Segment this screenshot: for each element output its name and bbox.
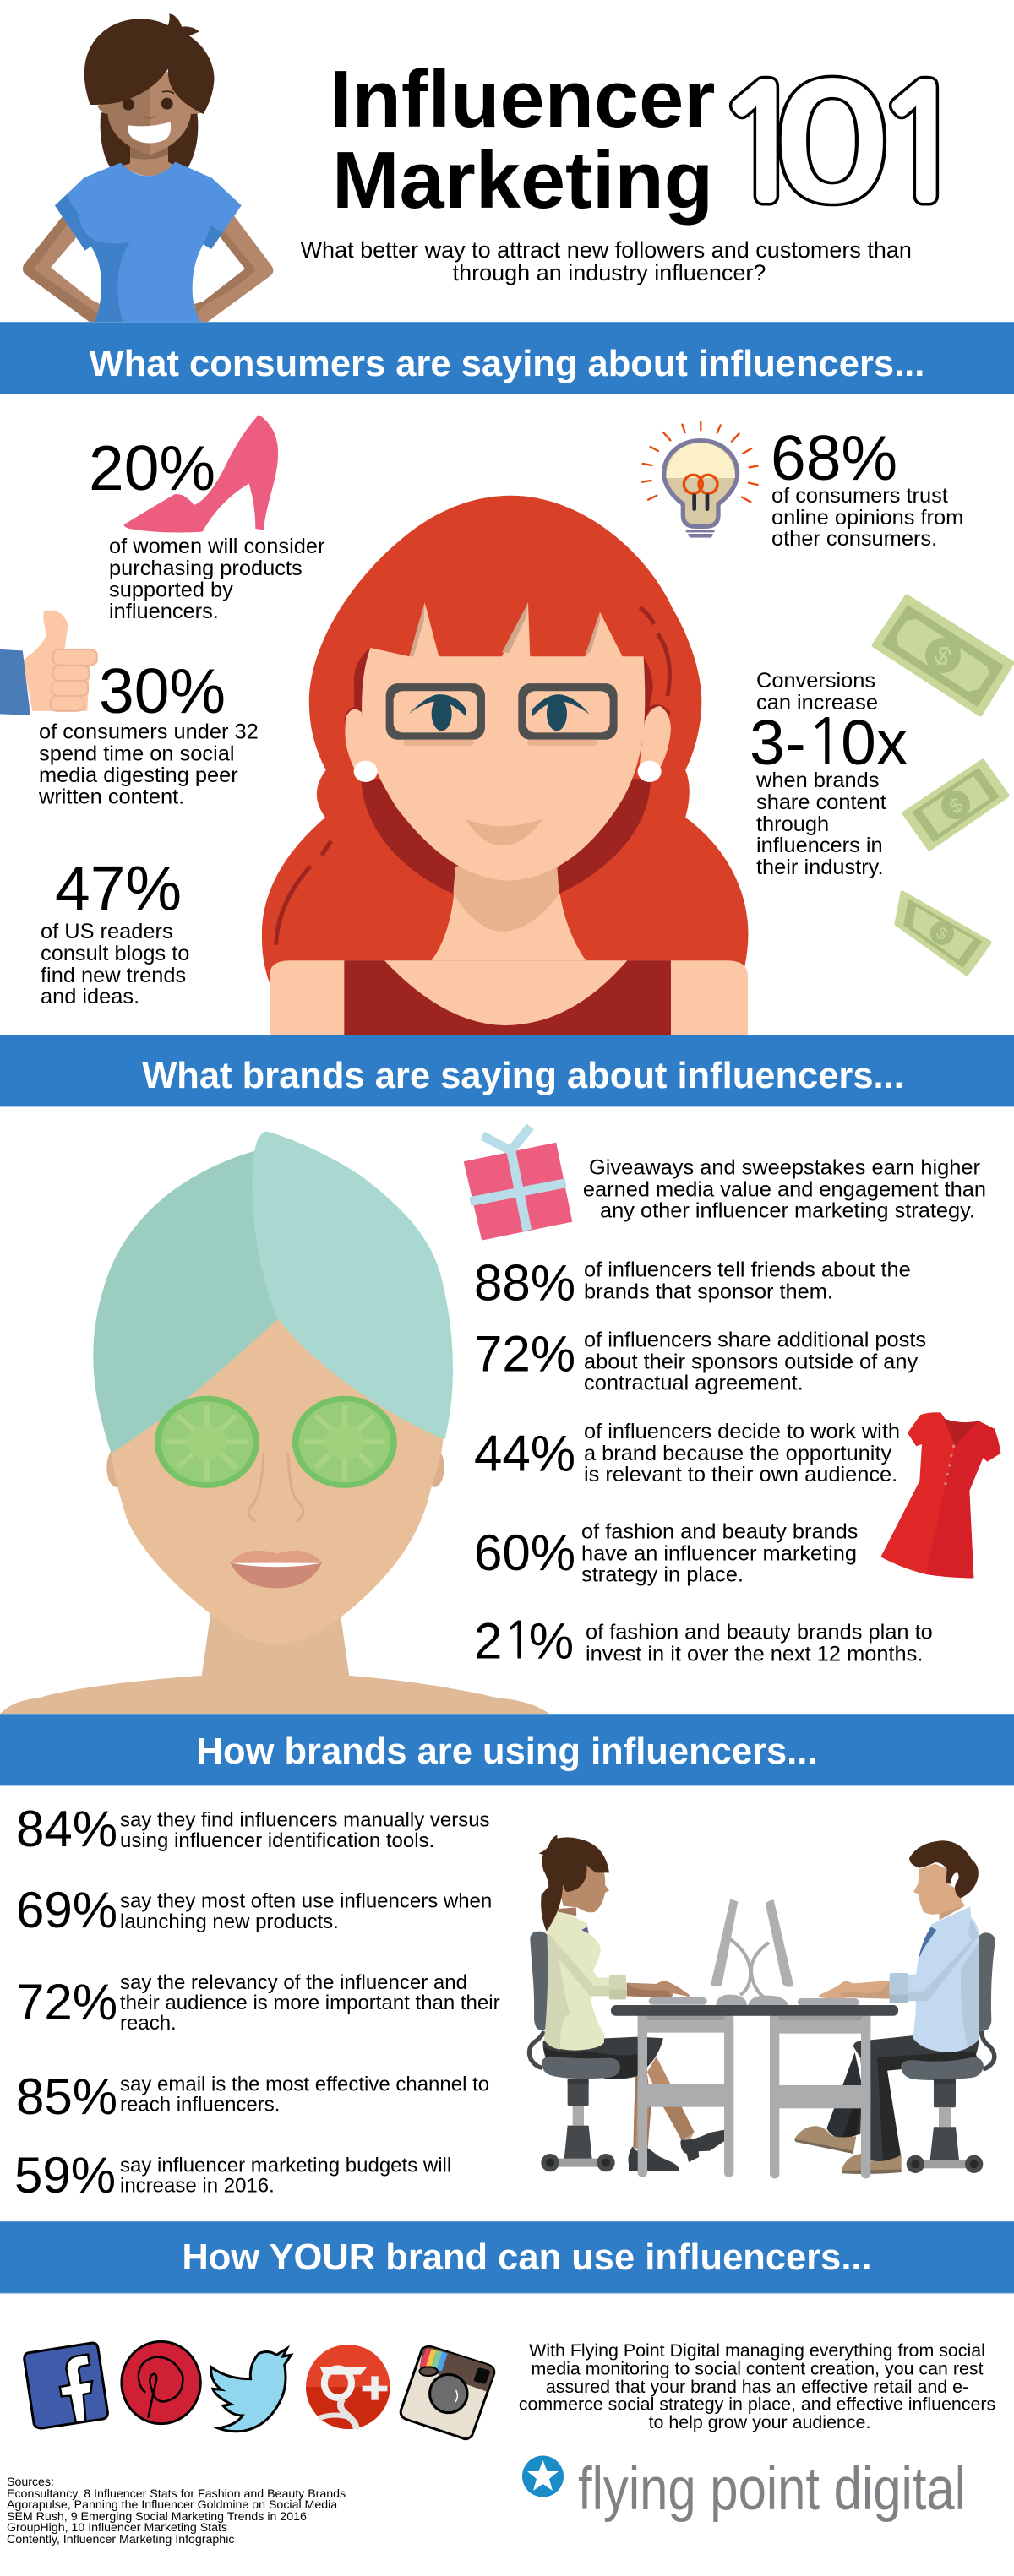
stat: 44%: 44% (474, 1426, 575, 1481)
banner: how your brand can use: How YOUR brand can use influencers... (182, 2237, 872, 2278)
stat: 59%: increase in 2016. (120, 2174, 275, 2198)
icon: dollar bill large: $ (930, 639, 957, 672)
stat: 72% relevancy: say the relevancy of the influencer and (120, 1971, 467, 1994)
title number: outlined 101: 1 (875, 67, 968, 220)
stat: 85%: 85% (16, 2068, 117, 2125)
stat: 84%: 84% (16, 1801, 117, 1857)
sources: SEM Rush, 9 Emerging Social Marketing Trends in 2016 (7, 2510, 307, 2524)
stat: 59% (14, 2147, 451, 2204)
stat: 72% share additional posts (474, 1326, 926, 1395)
stat: 69%: launching new products. (120, 1910, 339, 1933)
text: flying point digital pitch: With Flying Point Digital managing everything from social (529, 2340, 985, 2361)
stat: 60% (474, 1520, 859, 1586)
stat: 85% (16, 2068, 489, 2125)
title number: outlined 101: 0 (776, 66, 887, 220)
stat: 44%: a brand because the opportunity (584, 1442, 892, 1465)
banner: what consumers are saying: What consumers are saying about influencers... (90, 344, 924, 384)
sources: Agorapulse, Panning the Influencer Goldmine on Social Media (7, 2498, 337, 2512)
stat: 84%: say they find influencers manually versus (120, 1809, 490, 1831)
stat: 88%: 88% (474, 1255, 575, 1311)
subtitle: through an industry influencer? (453, 260, 766, 285)
illustration: red-haired woman with glasses (262, 496, 748, 1048)
stat: 72% share additional posts: about their sponsors outside of any (584, 1350, 919, 1373)
stat: conversions 3-10x: Conversions (756, 669, 875, 693)
icon: gift box (464, 1127, 572, 1241)
banner: what consumers are saying (0, 323, 1014, 394)
text: giveaways and sweepstakes: earned media value and engagement than (583, 1177, 986, 1201)
title number: outlined 101 (715, 66, 968, 220)
icon: pink high heel (124, 415, 278, 533)
stat: 20% of women: purchasing products (109, 557, 303, 580)
banner: what brands are saying (0, 1035, 1014, 1106)
icon: dollar bill small: $ (933, 924, 951, 944)
icon: pinterest (122, 2341, 200, 2424)
title number: outlined 101: 1 (715, 67, 808, 220)
stat: 21% (474, 1613, 933, 1669)
stat: conversions 3-10x: their industry. (756, 856, 884, 879)
icon: instagram camera (401, 2346, 494, 2439)
icon: thumbs up (0, 611, 97, 715)
stat: 44%: of influencers decide to work with (584, 1420, 900, 1443)
subtitle: What better way to attract new followers and customers than (301, 237, 912, 263)
sources: GroupHigh, 10 Influencer Marketing Stats (7, 2521, 227, 2535)
title number: outlined 101: 0 (776, 66, 887, 220)
stat: conversions 3-10x: influencers in (756, 834, 883, 857)
stat: 84% (16, 1801, 490, 1857)
stat: 72% share additional posts: 72% (474, 1326, 575, 1382)
stat: 68% trust online opinions: other consumers. (771, 527, 937, 551)
stat: 30% of consumers under 32: media digesting peer (39, 764, 238, 787)
stat: 88% (474, 1255, 911, 1311)
stat: 44%: is relevant to their own audience. (584, 1463, 897, 1486)
stat: 44% (474, 1420, 900, 1486)
stat: conversions 3-10x: when brands (755, 769, 879, 792)
stat: conversions 3-10x: through (756, 812, 829, 836)
icon: light bulb (642, 421, 758, 538)
banner: how your brand can use (0, 2221, 1014, 2293)
stat: 72% relevancy: their audience is more important than their (120, 1992, 500, 2014)
stat: 69% (16, 1882, 492, 1938)
stat: 47% of US readers (41, 853, 196, 1008)
stat: 60%: have an influencer marketing (581, 1542, 857, 1566)
stat: 59%: 59% (14, 2147, 116, 2204)
title (330, 55, 715, 226)
stat: 30% of consumers under 32: spend time on social (39, 742, 234, 765)
stat: 30% of consumers under 32: 30% (99, 655, 226, 726)
illustration: woman with towel and cucumber slices (0, 1131, 556, 1720)
text: giveaways and sweepstakes: Giveaways and sweepstakes earn higher (589, 1155, 980, 1179)
stat: 88%: of influencers tell friends about the (584, 1258, 911, 1282)
illustration: woman at desk (529, 1835, 769, 2177)
illustration: smiling woman in blue shirt (23, 13, 273, 323)
stat: 72% relevancy: reach. (120, 2012, 177, 2035)
stat: 69%: 69% (16, 1882, 117, 1938)
stat: conversions 3-10x: 3-10x (750, 707, 908, 778)
text: giveaways and sweepstakes: any other influencer marketing strategy. (600, 1199, 975, 1223)
banner: what brands are saying: What brands are saying about influencers... (142, 1056, 904, 1096)
stat: 68% trust online opinions: of consumers trust (771, 484, 948, 508)
stat: 60%: strategy in place. (581, 1562, 744, 1586)
stat: 20% of women: supported by (109, 578, 233, 601)
icon: dollar bill medium: $ (946, 793, 968, 818)
icon: google plus (306, 2345, 390, 2429)
stat: 60%: of fashion and beauty brands (581, 1520, 859, 1544)
stat: conversions 3-10x: can increase (756, 691, 878, 715)
stat: 85%: say email is the most effective channel to (120, 2073, 489, 2096)
stat: 21%: invest in it over the next 12 months. (586, 1642, 923, 1666)
stat: 47% of US readers: consult blogs to (41, 942, 189, 965)
stat: 60%: 60% (474, 1524, 575, 1581)
stat: 47% of US readers: and ideas. (41, 985, 139, 1008)
stat: 68% trust online opinions: online opinions from (771, 506, 963, 530)
stat: 84%: using influencer identification tools. (120, 1829, 434, 1852)
stat: 20% of women: of women will consider (109, 535, 325, 558)
stat: 20% of women (89, 432, 330, 623)
icon: dollar bill medium (904, 761, 1007, 849)
banner: how brands are using: How brands are using influencers... (197, 1731, 817, 1772)
title number: outlined 101: 1 (875, 67, 968, 220)
stat: 30% of consumers under 32: of consumers under 32 (39, 720, 259, 743)
stat: 20% of women: influencers. (109, 600, 219, 623)
text: flying point digital pitch: commerce social strategy in place, and effective influencers (519, 2394, 995, 2414)
stat: 72% relevancy (16, 1971, 500, 2035)
icon: dollar bill large (874, 596, 1012, 715)
stat: 72% share additional posts: of influencers share additional posts (584, 1328, 926, 1351)
title: Marketing (332, 136, 713, 226)
stat: 30% of consumers under 32: written content. (38, 785, 184, 809)
stat: 20% of women: 20% (89, 432, 215, 503)
sources: Econsultancy, 8 Influencer Stats for Fashion and Beauty Brands (7, 2487, 346, 2501)
stat: 30% of consumers under 32 (38, 655, 264, 809)
stat: 47% of US readers: of US readers (41, 920, 173, 943)
title: Influencer (330, 55, 715, 144)
text: flying point digital pitch: media monitoring to social content creation, you can rest (531, 2358, 984, 2378)
stat: conversions 3-10x (750, 669, 908, 879)
stat: 88%: brands that sponsor them. (584, 1280, 833, 1304)
stat: 59%: say influencer marketing budgets will (120, 2154, 451, 2177)
icon: dollar bill small (897, 893, 989, 974)
text: flying point digital pitch: to help grow your audience. (649, 2412, 870, 2432)
text: flying point digital pitch: assured that your brand has an effective retail and e- (546, 2377, 968, 2397)
illustration: man at desk (748, 1840, 995, 2178)
stat: 68% trust online opinions (771, 422, 969, 551)
stat: 69%: say they most often use influencers when (120, 1890, 492, 1912)
icon: facebook (25, 2343, 107, 2428)
icon: twitter bird (210, 2349, 291, 2432)
stat: 21%: of fashion and beauty brands plan to (586, 1620, 933, 1644)
sources: Contently, Influencer Marketing Infographic (7, 2533, 234, 2546)
stat: conversions 3-10x: share content (756, 791, 886, 814)
stat: 47% of US readers: 47% (55, 853, 182, 924)
banner: how brands are using (0, 1715, 1014, 1785)
stat: 72% share additional posts: contractual agreement. (584, 1372, 804, 1395)
stat: 72% relevancy: 72% (16, 1974, 117, 2030)
stat: 68% trust online opinions: 68% (771, 422, 897, 493)
desk top (611, 2005, 898, 2016)
title number: outlined 101: 1 (715, 67, 808, 220)
stat: 21%: 21% (474, 1613, 574, 1669)
sources: Sources: (7, 2475, 54, 2489)
icon: red dress (880, 1412, 1000, 1578)
stat: 85%: reach influencers. (120, 2093, 280, 2117)
stat: 47% of US readers: find new trends (41, 964, 186, 987)
